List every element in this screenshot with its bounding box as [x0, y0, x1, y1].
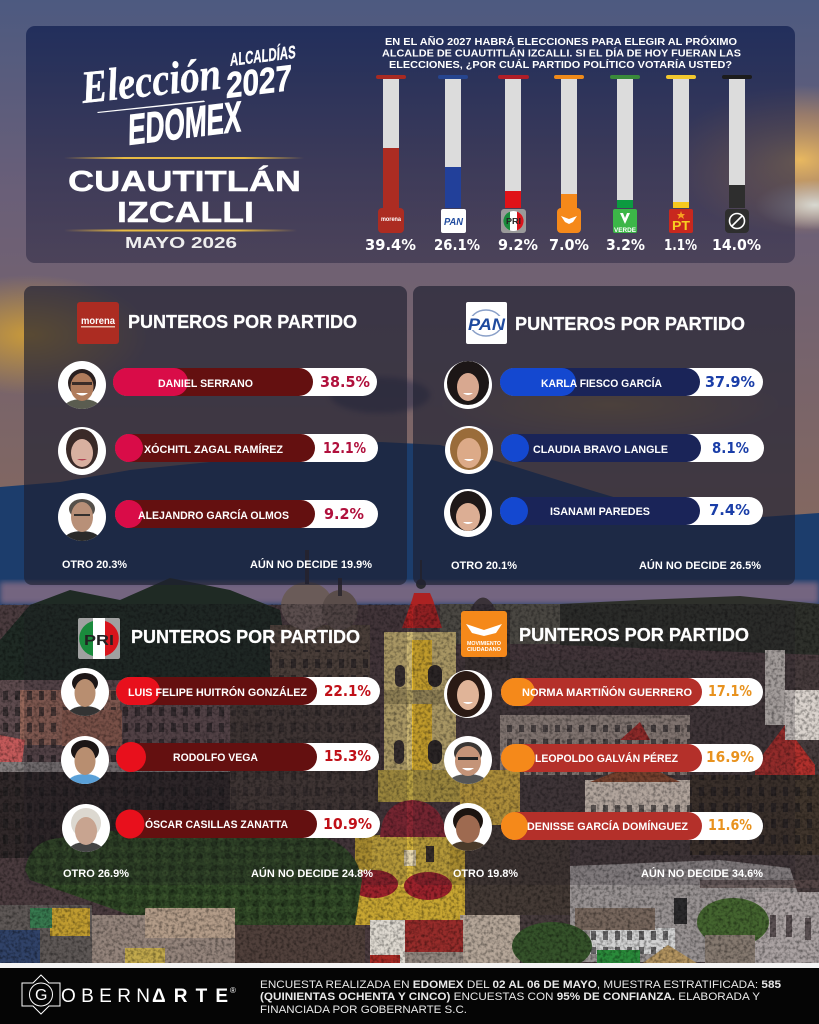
icon: Morena logo: [77, 302, 119, 344]
candidate: Óscar Casillas Zanatta: [62, 804, 380, 852]
bar: PAN 26.1%: 26.1%: [434, 236, 480, 254]
bar: PAN 26.1%: [434, 75, 480, 254]
right city: [460, 660, 819, 965]
icon: Movimiento Ciudadano logo: [461, 611, 507, 657]
trees bottom left: [25, 831, 362, 945]
candidate: Claudia Bravo Langle: 8.1%: [712, 439, 749, 457]
logo: Gobernarte: G: [35, 987, 47, 1004]
municipality heading: CUAUTITLÁN: [68, 164, 301, 198]
candidate: Leopoldo Galván Pérez: LEOPOLDO GALVÁN PÉREZ: [535, 752, 678, 765]
municipality heading: IZCALLI: [117, 197, 254, 229]
icon: Morena logo: morena: [81, 316, 115, 327]
icon: PRI logo: PRI: [84, 632, 114, 649]
bar: Verde 3.2%: 3.2%: [606, 236, 645, 254]
icon: Movimiento Ciudadano logo: CIUDADANO: [467, 647, 502, 653]
candidate: Karla Fiesco García: [444, 361, 763, 409]
grey building right: [570, 860, 800, 962]
logo: Elección Edomex Alcaldías 2027: ALCALDÍAS: [230, 41, 296, 70]
cathedral: [270, 625, 370, 795]
bar: Movimiento Ciudadano 7.0%: 7.0%: [549, 236, 589, 254]
question: ELECCIONES, ¿POR CUÁL PARTIDO POLÍTICO VOTARÍA USTED?: [389, 58, 732, 71]
other: OTRO 19.8%: [453, 868, 518, 880]
other: OTRO 26.9%: [63, 868, 129, 880]
heading: PUNTEROS POR PARTIDO: [515, 314, 745, 334]
logo: Elección Edomex Alcaldías 2027: EDOMEX: [128, 93, 242, 155]
undecided: AÚN NO DECIDE 19.9%: [250, 558, 372, 571]
candidate: Karla Fiesco García: KARLA FIESCO GARCÍA: [541, 377, 662, 390]
candidate: Denisse García Domínguez: [444, 803, 763, 851]
candidate: Daniel Serrano: DANIEL SERRANO: [158, 378, 253, 390]
bar: Morena 39.4%: morena: [381, 216, 401, 223]
bar: sin respuesta 14.0%: [712, 75, 761, 254]
survey methodology note: [260, 979, 781, 1016]
bar: PAN 26.1%: PAN: [444, 217, 464, 228]
heading: PUNTEROS POR PARTIDO: [519, 625, 749, 645]
bottom left buildings: [90, 915, 235, 965]
candidate: Óscar Casillas Zanatta: 10.9%: [323, 815, 372, 833]
other: OTRO 20.1%: [451, 560, 517, 572]
question: ALCALDE DE CUAUTITLÁN IZCALLI. SI EL DÍA DE HOY FUERAN LAS: [382, 46, 741, 60]
bar: PT 1.1%: [664, 75, 697, 254]
date: MAYO 2026: [125, 235, 237, 252]
candidate: Norma Martiñón Guerrero: NORMA MARTIÑÓN GUERRERO: [522, 686, 692, 699]
icon: Movimiento Ciudadano logo: MOVIMIENTO: [467, 641, 502, 647]
panel: PAN: [413, 286, 795, 585]
logo: Elección Edomex Alcaldías 2027: 2027: [226, 57, 292, 106]
logo: Gobernarte: [22, 975, 236, 1014]
hillside and far city: [0, 605, 819, 965]
bar: Verde 3.2%: VERDE: [614, 227, 637, 234]
other: OTRO 20.3%: [62, 559, 127, 571]
candidate: Luis Felipe Huitrón González: [61, 668, 380, 716]
bar: sin respuesta 14.0%: 14.0%: [712, 236, 761, 254]
undecided: AÚN NO DECIDE 26.5%: [639, 559, 761, 572]
divider bottom: [64, 230, 297, 232]
candidate: Claudia Bravo Langle: CLAUDIA BRAVO LANGLE: [533, 444, 668, 456]
candidate: Denisse García Domínguez: DENISSE GARCÍA DOMÍNGUEZ: [527, 820, 688, 833]
candidate: Leopoldo Galván Pérez: [444, 736, 763, 784]
bar: Movimiento Ciudadano 7.0%: [549, 75, 589, 254]
divider top: [64, 157, 304, 159]
bar: Verde 3.2%: [606, 75, 645, 254]
candidate: Alejandro García Olmos: ALEJANDRO GARCÍA OLMOS: [138, 509, 289, 522]
candidate: Rodolfo Vega: RODOLFO VEGA: [173, 752, 258, 764]
icon: PRI logo: [78, 618, 120, 659]
question: EN EL AÑO 2027 HABRÁ ELECCIONES PARA ELEGIR AL PRÓXIMO: [385, 35, 737, 48]
bottom centre roofs: [460, 915, 520, 965]
candidate: Rodolfo Vega: [61, 736, 379, 784]
candidate: Xóchitl Zagal Ramírez: [58, 427, 378, 475]
bar: PRI 9.2%: PRI: [506, 217, 521, 226]
candidate: Norma Martiñón Guerrero: 17.1%: [708, 682, 752, 700]
candidate: Isanami Paredes: [444, 489, 763, 537]
logo: Gobernarte: ®: [230, 986, 236, 995]
candidate: Daniel Serrano: [58, 361, 377, 409]
panel: Movimiento Ciudadano: [413, 604, 795, 885]
footer bar: [0, 963, 819, 1024]
undecided: AÚN NO DECIDE 24.8%: [251, 867, 373, 880]
bar: Morena 39.4%: [365, 75, 416, 254]
municipality heading: [68, 164, 301, 229]
candidate: Denisse García Domínguez: 11.6%: [708, 816, 752, 834]
candidate: Claudia Bravo Langle: [445, 426, 764, 474]
bar: Morena 39.4%: 39.4%: [365, 236, 416, 254]
undecided: AÚN NO DECIDE 34.6%: [641, 867, 763, 880]
survey methodology note: FINANCIADA POR GOBERNARTE S.C.: [260, 1004, 467, 1016]
panel: overall party vote: [26, 26, 795, 263]
candidate: Isanami Paredes: 7.4%: [709, 501, 750, 519]
candidate: Luis Felipe Huitrón González: 22.1%: [324, 682, 371, 700]
bar: PRI 9.2%: 9.2%: [498, 236, 538, 254]
question: [382, 35, 741, 71]
logo: Elección Edomex Alcaldías 2027: [78, 41, 296, 155]
bar: PT 1.1%: 1.1%: [664, 236, 697, 254]
icon: PAN logo: [466, 302, 507, 344]
logo: Gobernarte: ΔRTE: [152, 986, 228, 1007]
heading: PUNTEROS POR PARTIDO: [131, 627, 360, 647]
candidate: Óscar Casillas Zanatta: ÓSCAR CASILLAS ZANATTA: [145, 818, 288, 831]
logo: Gobernarte: OBERN: [61, 986, 150, 1007]
candidate: Alejandro García Olmos: [58, 493, 378, 541]
bar: PT 1.1%: PT: [672, 218, 690, 233]
icon: PAN logo: PAN: [468, 315, 506, 334]
candidate: Karla Fiesco García: 37.9%: [705, 373, 755, 391]
bar chart: party vote: [365, 75, 761, 254]
bar: PRI 9.2%: [498, 75, 538, 254]
yellow church: [384, 632, 456, 772]
candidate: Norma Martiñón Guerrero: [444, 670, 763, 718]
candidate: Xóchitl Zagal Ramírez: 12.1%: [323, 439, 366, 457]
candidate: Isanami Paredes: ISANAMI PAREDES: [550, 506, 650, 518]
logo: Elección Edomex Alcaldías 2027: Elección: [78, 48, 223, 113]
panel: Morena: [24, 286, 407, 585]
heading: PUNTEROS POR PARTIDO: [128, 312, 357, 332]
candidate: Alejandro García Olmos: 9.2%: [324, 505, 364, 523]
survey methodology note: ENCUESTA REALIZADA EN EDOMEX DEL 02 AL 06 DE MAYO , MUESTRA ESTRATIFICADA: 585: [260, 979, 781, 991]
panel: PRI: [24, 604, 407, 885]
candidate: Daniel Serrano: 38.5%: [320, 373, 370, 391]
survey methodology note: (QUINIENTAS OCHENTA Y CINCO) ENCUESTAS CON 95% DE CONFIANZA. ELABORADA Y: [260, 991, 760, 1003]
candidate: Luis Felipe Huitrón González: LUIS FELIPE HUITRÓN GONZÁLEZ: [128, 686, 307, 699]
candidate: Xóchitl Zagal Ramírez: XÓCHITL ZAGAL RAMÍREZ: [144, 443, 283, 456]
candidate: Rodolfo Vega: 15.3%: [324, 747, 371, 765]
candidate: Leopoldo Galván Pérez: 16.9%: [706, 748, 754, 766]
